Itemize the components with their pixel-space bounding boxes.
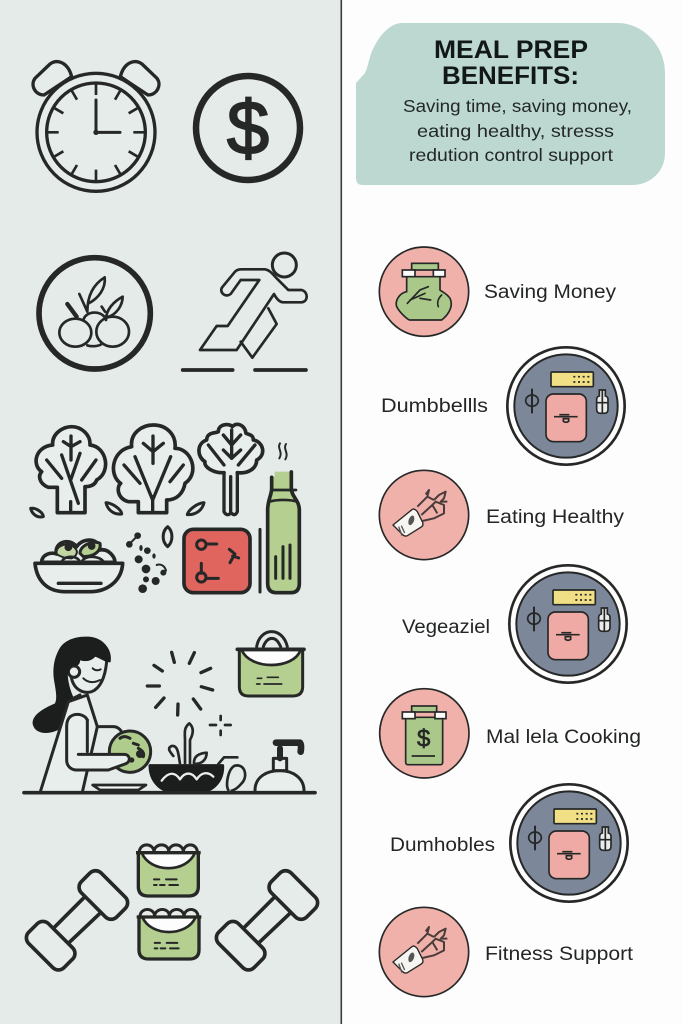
seeds	[126, 532, 166, 593]
icon: dumbbell left	[23, 867, 131, 973]
counter	[24, 787, 315, 798]
icon: gray circle three	[510, 784, 628, 902]
label: vegeaziel: Vegeaziel	[402, 617, 490, 638]
body text: Saving time, saving money,	[403, 96, 632, 116]
icon: gray circle one	[507, 347, 625, 465]
container	[239, 650, 303, 696]
icon: runner	[183, 253, 307, 370]
dispenser	[255, 771, 304, 791]
icon: dollar coin	[196, 76, 300, 180]
panel: left background	[0, 0, 341, 1024]
icon: fitness support	[379, 907, 469, 997]
callout: meal prep benefits	[356, 23, 665, 185]
salad bowl	[35, 540, 123, 592]
ponytail	[33, 642, 74, 733]
hair cap	[57, 637, 110, 678]
body text: eating healthy, stresss	[417, 121, 614, 141]
icon: dollar jar	[380, 689, 469, 778]
icon: dumbbell right	[213, 867, 321, 973]
label: saving money: Saving Money	[484, 282, 617, 303]
icon: alarm clock	[33, 62, 159, 191]
label: meal cooking: Mal lela Cooking	[486, 727, 641, 748]
panel: right background	[342, 0, 683, 1024]
face	[71, 647, 107, 692]
icon: eating healthy	[379, 470, 469, 560]
label: fitness support: Fitness Support	[485, 944, 634, 965]
icon: dollar jar: $	[417, 726, 430, 753]
center divider	[340, 0, 342, 1024]
sunburst	[147, 652, 213, 715]
plate	[93, 785, 146, 790]
heading	[434, 36, 588, 90]
bowl	[150, 766, 223, 792]
heading: MEAL PREP	[434, 36, 588, 64]
label: eating healthy: Eating Healthy	[486, 507, 625, 528]
bottle	[268, 443, 299, 593]
icon: meal containers	[136, 845, 201, 959]
heading: BENEFITS:	[442, 62, 579, 90]
leafy green three	[199, 424, 263, 515]
icon: vegetables in circle	[39, 258, 150, 369]
icon: dollar coin: $	[227, 86, 269, 171]
leafy green one	[36, 427, 106, 513]
label: dumbbells: Dumbbellls	[381, 396, 488, 417]
icon: gray circle two	[509, 565, 627, 683]
body text	[403, 96, 632, 165]
body and arm	[41, 695, 97, 791]
icon: vegetables row	[31, 424, 299, 593]
icon: saving money jar	[379, 247, 469, 336]
red box	[184, 529, 260, 593]
illustration: woman cooking	[24, 632, 315, 793]
label: dumhobles: Dumhobles	[390, 835, 495, 856]
leafy green two	[113, 425, 193, 513]
body text: redution control support	[409, 145, 613, 165]
